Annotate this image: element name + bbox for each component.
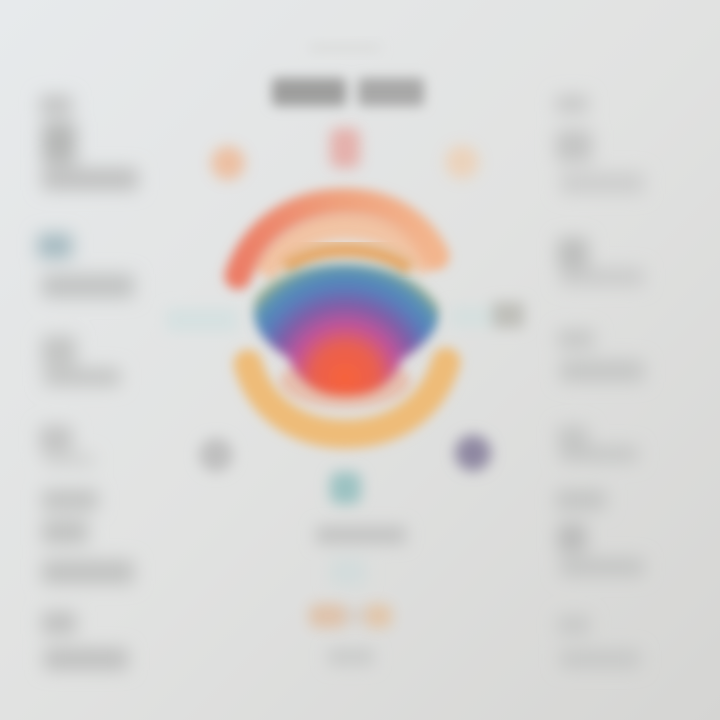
text block: right 4	[558, 426, 638, 462]
icon: bottom centre marker	[330, 472, 361, 504]
left column text	[38, 96, 138, 670]
icon: top right circle	[445, 145, 479, 179]
icon: lower right	[455, 435, 491, 471]
arc: pale inner band	[262, 226, 432, 274]
text: bottom centre	[316, 526, 406, 666]
text block: right 6	[558, 616, 640, 668]
label: middle left	[166, 308, 238, 332]
text block: right 1	[556, 96, 644, 194]
text block: right 2	[558, 238, 644, 286]
text block: left 2	[38, 234, 134, 298]
text block: left 3	[42, 336, 120, 386]
arc: inner orange band	[285, 250, 410, 270]
halo under core	[279, 356, 411, 408]
icon: top centre marker	[330, 128, 360, 168]
text block: right 3	[558, 330, 644, 382]
arc: bottom orange band	[248, 362, 446, 434]
text block: left 5	[42, 490, 134, 584]
icons: bottom centre pair	[309, 604, 392, 628]
text block: left 4	[40, 426, 94, 466]
icon: lower left	[199, 438, 233, 472]
arc: outer top band	[238, 202, 436, 276]
text block: left 6	[42, 612, 128, 670]
core: blue to red dome	[254, 264, 439, 396]
concentric diagram	[238, 202, 446, 434]
label: middle right	[450, 302, 524, 328]
icon: top left circle	[211, 146, 245, 180]
text block: left 1	[40, 96, 138, 190]
subtitle	[310, 44, 380, 52]
title	[272, 78, 424, 106]
right column text	[556, 96, 644, 668]
text block: right 5	[556, 490, 644, 576]
